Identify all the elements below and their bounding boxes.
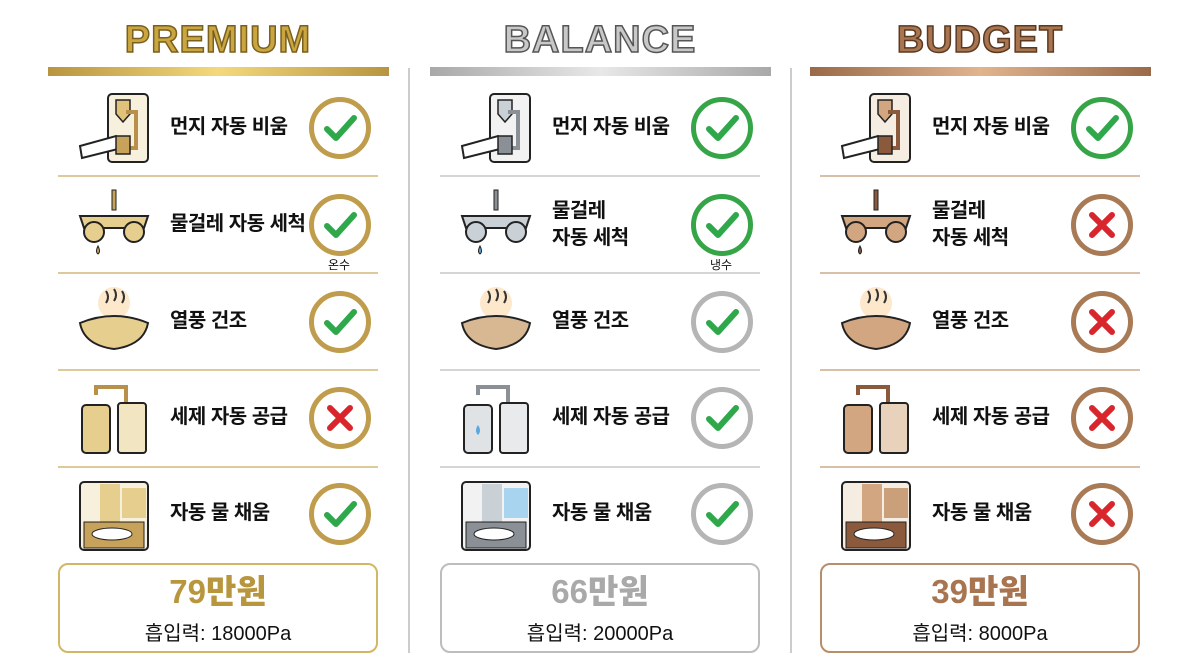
- icon: water fill: [79, 481, 149, 551]
- price box: [820, 563, 1140, 653]
- price box: 39만원: [931, 573, 1029, 610]
- icon: detergent: [843, 385, 909, 454]
- check: [309, 291, 371, 353]
- panel: premium: [48, 19, 389, 653]
- icon: water fill: [841, 481, 911, 551]
- icon: mop: [78, 190, 150, 255]
- check: [691, 387, 753, 449]
- note: 온수: [328, 258, 350, 272]
- check: [309, 97, 371, 159]
- check: [691, 194, 753, 256]
- label: 먼지 자동 비움: [552, 116, 670, 138]
- label: 세제 자동 공급: [552, 406, 670, 428]
- cross: [1071, 291, 1133, 353]
- divider 2: [790, 68, 792, 653]
- cross: [1071, 387, 1133, 449]
- check: [1071, 97, 1133, 159]
- label: 자동 세척: [932, 227, 1009, 249]
- check: [691, 483, 753, 545]
- divider 1: [408, 68, 410, 653]
- cross: [1071, 194, 1133, 256]
- price box: 79만원: [169, 573, 267, 610]
- icon: dust station: [840, 93, 911, 163]
- icon: water fill: [461, 481, 531, 551]
- icon: dust station: [78, 93, 149, 163]
- label: 세제 자동 공급: [170, 406, 288, 428]
- label: 자동 물 채움: [552, 502, 652, 524]
- label: 열풍 건조: [552, 310, 629, 332]
- check: [309, 483, 371, 545]
- header bar: [810, 67, 1151, 76]
- label: 먼지 자동 비움: [932, 116, 1050, 138]
- label: 열풍 건조: [170, 310, 247, 332]
- icon: dust station: [460, 93, 531, 163]
- icon: mop: [840, 190, 912, 255]
- title: balance: BALANCE: [504, 19, 696, 61]
- price box: 흡입력: 8000Pa: [912, 623, 1048, 645]
- label: [552, 200, 629, 249]
- check: [309, 194, 371, 256]
- note: 냉수: [710, 258, 732, 272]
- check: [691, 97, 753, 159]
- price box: 흡입력: 18000Pa: [145, 623, 291, 645]
- price box: [58, 563, 378, 653]
- label: [932, 200, 1009, 249]
- label: 물걸레 자동 세척: [170, 213, 305, 235]
- label: 자동 물 채움: [932, 502, 1032, 524]
- icon: hot air: [78, 287, 150, 350]
- cross: [309, 387, 371, 449]
- label: 세제 자동 공급: [932, 406, 1050, 428]
- icon: mop: [460, 190, 532, 255]
- icon: hot air: [460, 287, 532, 350]
- header bar: [48, 67, 389, 76]
- icon: hot air: [840, 287, 912, 350]
- label: 열풍 건조: [932, 310, 1009, 332]
- price box: 흡입력: 20000Pa: [527, 623, 673, 645]
- price box: [440, 563, 760, 653]
- label: 물걸레: [932, 200, 986, 222]
- label: 물걸레: [552, 200, 606, 222]
- cross: [1071, 483, 1133, 545]
- icon: detergent: [81, 385, 147, 454]
- panel: balance: [430, 19, 771, 653]
- label: 자동 물 채움: [170, 502, 270, 524]
- icon: detergent: [463, 385, 529, 454]
- header bar: [430, 67, 771, 76]
- label: 먼지 자동 비움: [170, 116, 288, 138]
- panel: budget: [810, 19, 1151, 653]
- price box: 66만원: [551, 573, 649, 610]
- label: 자동 세척: [552, 227, 629, 249]
- title: premium: PREMIUM: [125, 19, 311, 61]
- title: budget: BUDGET: [897, 19, 1063, 61]
- check: [691, 291, 753, 353]
